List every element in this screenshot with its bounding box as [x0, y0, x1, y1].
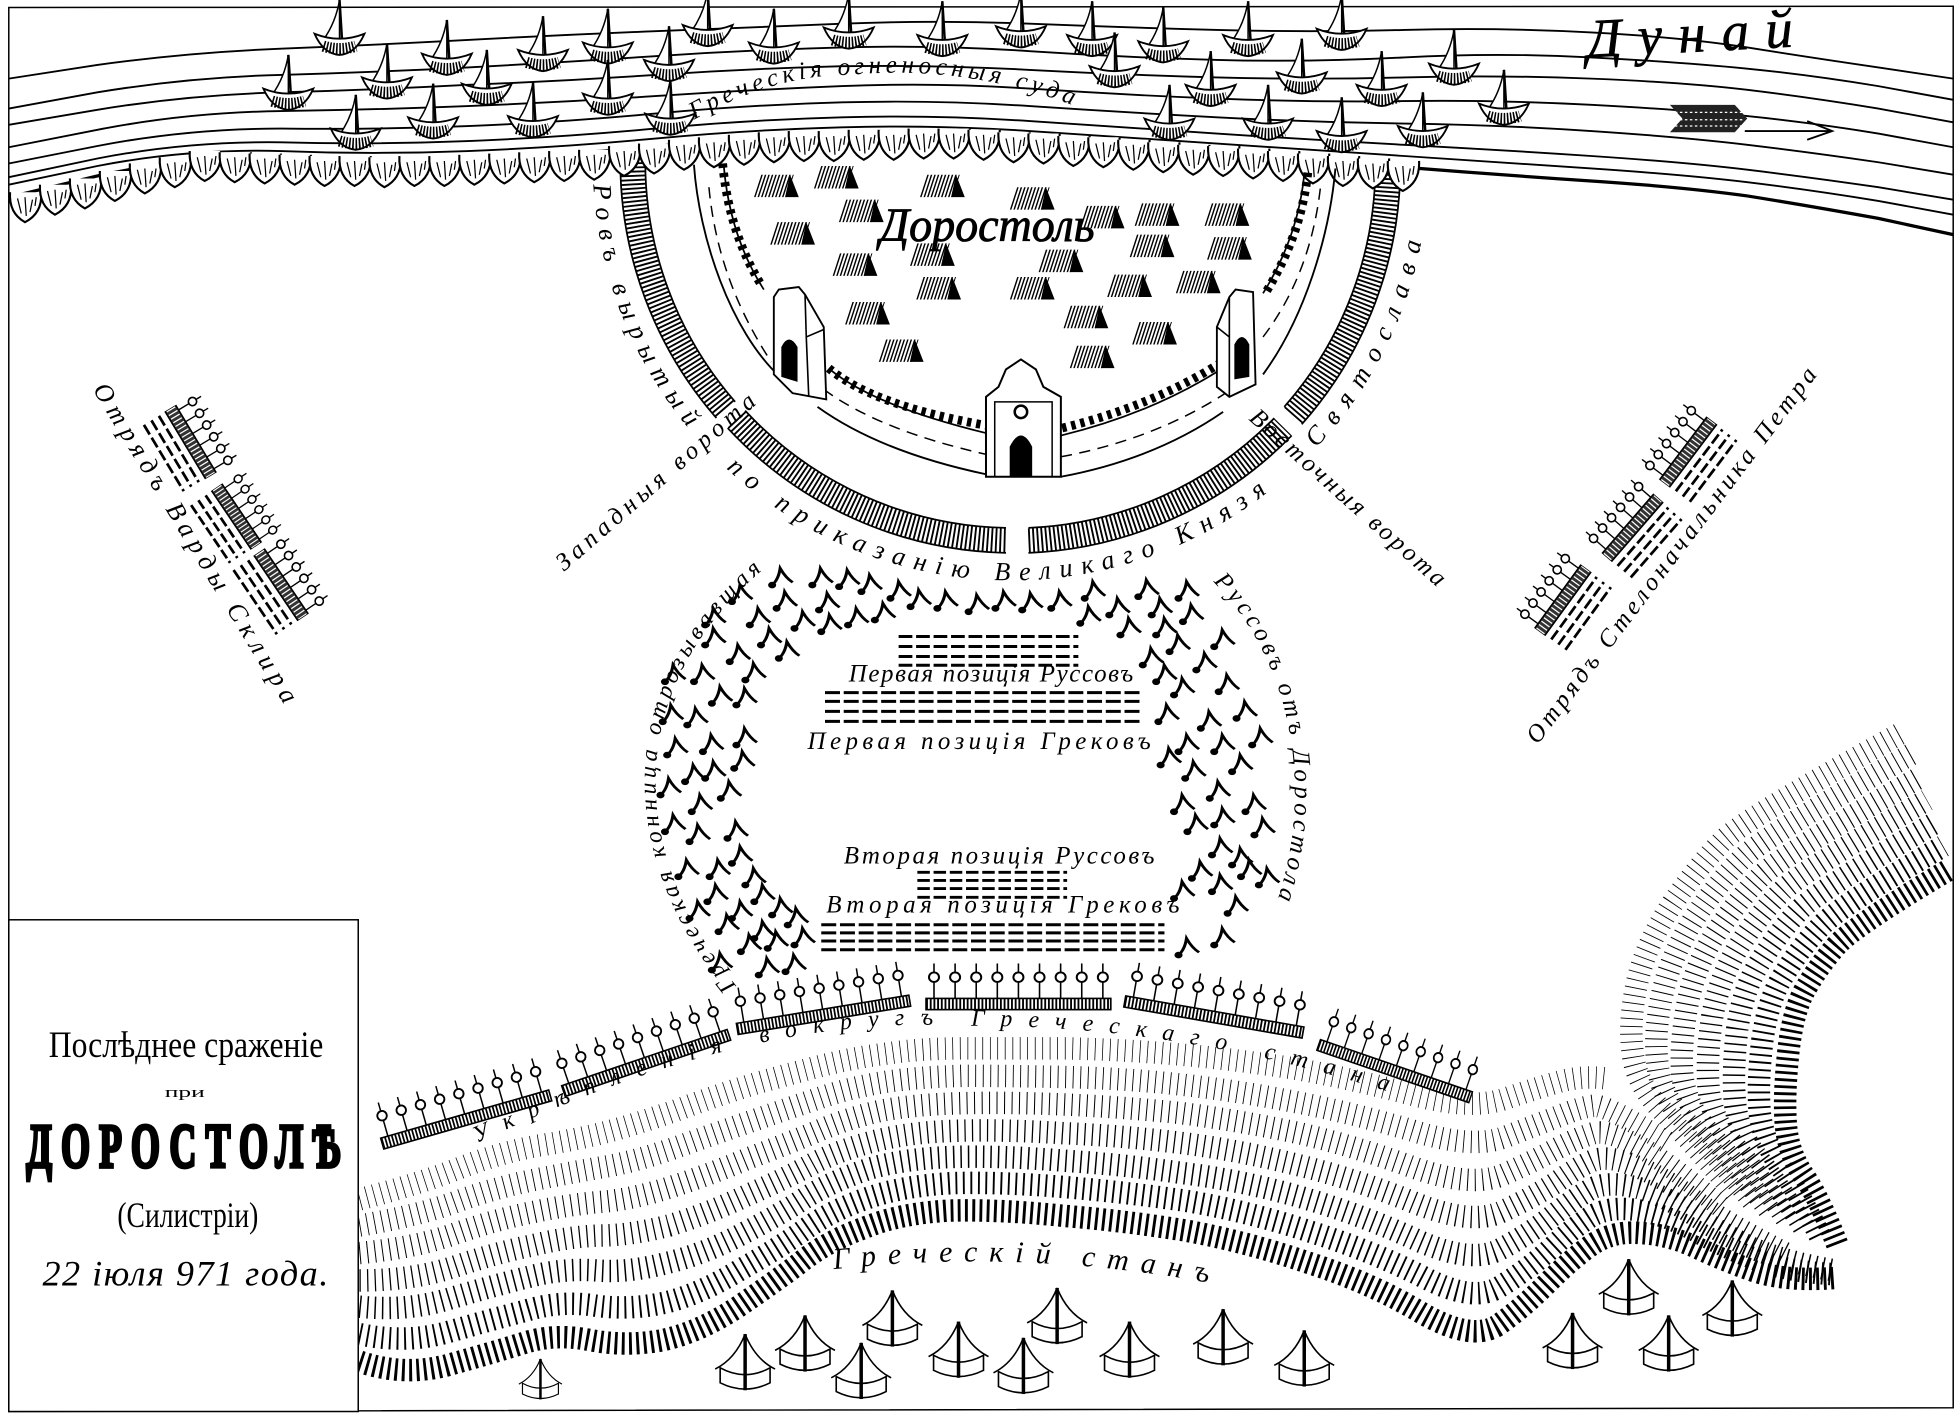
label: Greek cavalry cutting off: Греческая конница отрозывавщая: [644, 562, 761, 994]
label: fortifications around the Greek camp: Укрѣпленія вокругъ Греческаго стана: [472, 1010, 1390, 1142]
label: Greek fire ships: Греческія огненосныя суда: [688, 61, 1076, 120]
right gate tower: [1217, 290, 1256, 397]
town houses: [758, 166, 1252, 368]
central gate tower: [986, 359, 1061, 477]
Greek cavalry marks: [656, 568, 1279, 978]
label: eastern gate: Восточныя ворота: [1244, 404, 1451, 592]
second position of the Rus: troop lines: [917, 872, 1067, 897]
left gate tower: [774, 287, 826, 399]
label: detachment of Bardas Sclerus: Отрядъ Варды Склира: [87, 377, 304, 708]
title: Silistria: (Силистріи): [117, 1195, 258, 1235]
label: second position of the Rus: Вторая позиція Руссовъ: [844, 843, 1155, 870]
hill hachures around the Greek camp: [359, 731, 1951, 1370]
label: ditch dug by order of the Grand Prince Svyatoslav: Святослава: [1308, 240, 1422, 444]
title panel: [9, 920, 358, 1412]
detachment of Bardas Sclerus: [144, 392, 330, 635]
title: at: при: [165, 1085, 205, 1101]
label: first position of the Rus: Первая позиція Руссовъ: [848, 660, 1133, 687]
arrow: river flow: [1670, 105, 1832, 140]
label: western gate: Западныя ворота: [550, 388, 761, 576]
second position of the Greeks: troop lines: [821, 925, 1164, 950]
fleet of Greek fire ships: [263, 0, 1529, 152]
label: Dorostol town: Доростоль: [876, 200, 1095, 252]
label: detachment of Stratopedarch Peter: Отрядъ Стелоначальника Петра: [1521, 362, 1822, 749]
river bank stones: [10, 129, 1419, 222]
Greek camp tents: [519, 1259, 1762, 1399]
first position of the Rus: troop lines: [899, 636, 1078, 665]
label: first position of the Greeks: Первая позиція Грековъ: [807, 728, 1151, 755]
label: Greek camp: Греческій станъ: [834, 1242, 1208, 1282]
title: Dorostol: ДОРОСТОЛѢ: [26, 1112, 341, 1181]
title: date: 22 іюля 971 года.: [42, 1253, 328, 1293]
palisade of the fortified Greek camp: [371, 961, 1484, 1149]
label: second position of the Greeks: Вторая позиція Грековъ: [826, 891, 1179, 918]
title: last battle: Послѣднее сраженіе: [49, 1025, 323, 1066]
river Danube: [9, 22, 1953, 235]
label: ditch dug by order of the Grand Prince Svyatoslav: Ровъ вырытый: [593, 184, 702, 427]
fortress walls: [694, 163, 1335, 477]
label: Rus from Dorostol: Руссовъ отъ Доростола: [1213, 572, 1310, 902]
first position of the Greeks: troop lines: [825, 693, 1142, 721]
label: ditch dug by order of the Grand Prince Svyatoslav: по приказанію Великаго Князя: [726, 460, 1266, 580]
ditch around the fortress: [620, 162, 1400, 553]
detachment of Stratopedarch Peter: [1514, 401, 1737, 650]
label: ditch dug by order of the Grand Prince Svyatoslav: [593, 184, 1422, 580]
